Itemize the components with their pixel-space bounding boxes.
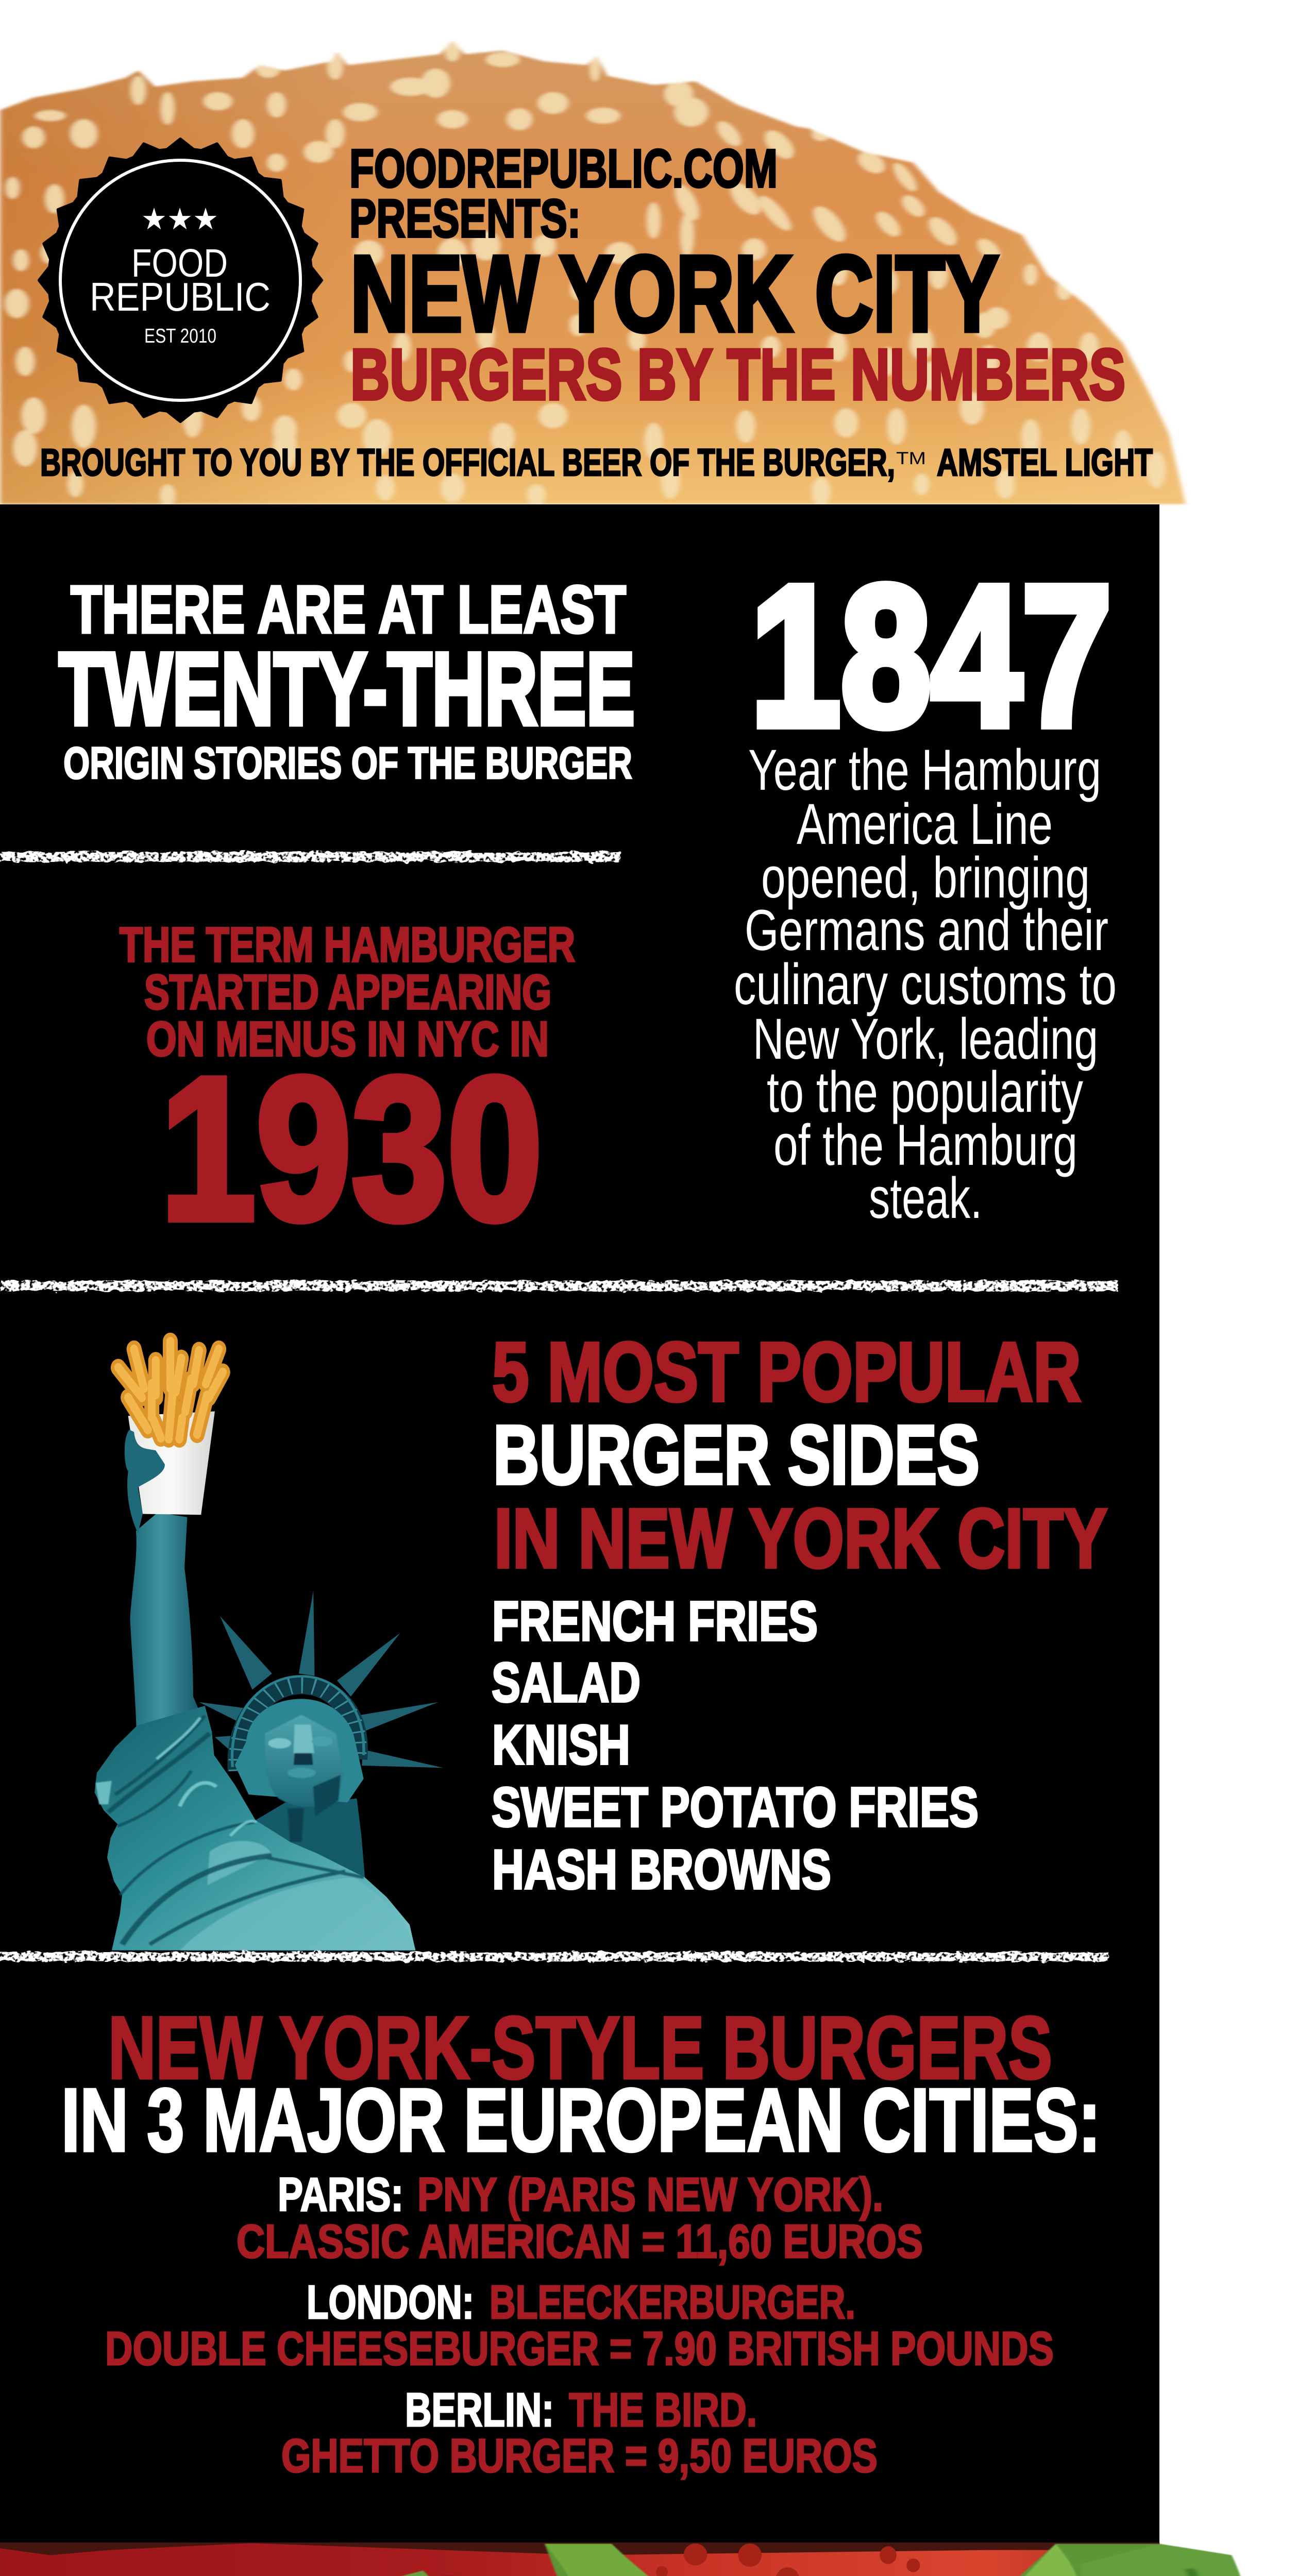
robe (94, 1706, 415, 1951)
black content panel (0, 504, 1159, 2543)
section: 5 most popular burger sides: BURGER SIDES (493, 1408, 980, 1502)
section: 5 most popular burger sides: 5 MOST POPULAR (492, 1325, 1081, 1419)
title block: FOODREPUBLIC.COM (349, 139, 778, 199)
crown rays (199, 1591, 444, 1768)
top bun with sesame seeds (0, 36, 1190, 506)
title block: PRESENTS: (349, 189, 581, 249)
section: 5 most popular burger sides: SWEET POTATO FRIES (492, 1776, 979, 1839)
fries (119, 1342, 223, 1439)
crown band (232, 1676, 364, 1771)
fact: 1847 Hamburg America Line: New York, leading (753, 1007, 1098, 1071)
logo badge: Food Republic: EST 2010 (144, 325, 216, 347)
section: 5 most popular burger sides: KNISH (492, 1714, 630, 1776)
fact: 1847 Hamburg America Line: opened, bringing (761, 845, 1090, 910)
fact: twenty-three origin stories: THERE ARE AT LEAST (71, 571, 626, 647)
fact: hamburger on menus 1930 (120, 918, 575, 1262)
section: 5 most popular burger sides (492, 1325, 1107, 1901)
fact: 1847 Hamburg America Line: America Line (797, 792, 1053, 856)
section: 5 most popular burger sides: SALAD (492, 1651, 641, 1714)
sponsor line: BROUGHT TO YOU BY THE OFFICIAL BEER OF THE BURGER, (40, 441, 895, 484)
fact: 1847 Hamburg America Line: 1847 (750, 545, 1112, 768)
fry cup (128, 1411, 215, 1515)
fact: 1847 Hamburg America Line (734, 545, 1117, 1230)
fact: hamburger on menus 1930: THE TERM HAMBURGER (120, 918, 575, 972)
lettuce folds (100, 2569, 1232, 2576)
raised arm (130, 1513, 199, 1756)
fact: 1847 Hamburg America Line: Year the Hamburg (748, 738, 1101, 802)
section: New York-style burgers in European cities (61, 1998, 1101, 2482)
section: New York-style burgers in European cities: BLEECKERBURGER. (490, 2276, 855, 2329)
logo badge: Food Republic: ★★★ (141, 201, 218, 236)
title block (349, 139, 1125, 415)
illustration: Statue of Liberty holding fries (94, 1342, 444, 1951)
section: 5 most popular burger sides: FRENCH FRIES (492, 1590, 818, 1653)
section: New York-style burgers in European cities: BERLIN: (405, 2384, 554, 2436)
fact: 1847 Hamburg America Line: steak. (869, 1166, 982, 1230)
fact: twenty-three origin stories: ORIGIN STORIES OF THE BURGER (63, 738, 632, 788)
head and hair (235, 1699, 364, 1803)
bottom burger: tomato, lettuce, sauce, bun (0, 2543, 1257, 2576)
sponsor line: TM (896, 449, 926, 468)
fact: hamburger on menus 1930: 1930 (160, 1035, 543, 1262)
fact: 1847 Hamburg America Line: Germans and their (745, 898, 1108, 962)
section: 5 most popular burger sides: IN NEW YORK CITY (494, 1491, 1107, 1585)
section: New York-style burgers in European cities: CLASSIC AMERICAN = 11,60 EUROS (237, 2215, 923, 2268)
sponsor line: AMSTEL LIGHT (937, 441, 1153, 484)
fact: 1847 Hamburg America Line: culinary customs to (734, 952, 1117, 1016)
section: New York-style burgers in European cities: DOUBLE CHEESEBURGER = 7.90 BRITISH POUNDS (105, 2323, 1054, 2375)
fact: 1847 Hamburg America Line: to the popularity (767, 1060, 1083, 1124)
fact: 1847 Hamburg America Line: of the Hamburg (773, 1113, 1077, 1177)
logo badge: Food Republic: FOOD (131, 241, 228, 285)
logo badge: Food Republic (39, 139, 322, 421)
lettuce (0, 2544, 1257, 2576)
hand (125, 1430, 165, 1533)
section: New York-style burgers in European cities: LONDON: (307, 2276, 474, 2329)
fact: hamburger on menus 1930: STARTED APPEARING (144, 965, 551, 1020)
fact: twenty-three origin stories (59, 571, 635, 788)
section: New York-style burgers in European cities: GHETTO BURGER = 9,50 EUROS (281, 2430, 878, 2482)
fact: hamburger on menus 1930: ON MENUS IN NYC IN (146, 1012, 549, 1066)
fact: twenty-three origin stories: TWENTY-THREE (59, 632, 635, 747)
section: New York-style burgers in European cities: PNY (PARIS NEW YORK). (417, 2168, 883, 2221)
section: New York-style burgers in European cities: THE BIRD. (569, 2384, 757, 2436)
title block: NEW YORK CITY (350, 234, 999, 354)
neck and hair falling (256, 1799, 365, 1877)
logo badge: Food Republic: REPUBLIC (90, 274, 271, 319)
tomato (0, 2543, 1159, 2576)
section: 5 most popular burger sides: HASH BROWNS (492, 1838, 831, 1901)
water drops (656, 2544, 937, 2576)
section: New York-style burgers in European cities: PARIS: (278, 2168, 403, 2221)
face (265, 1715, 343, 1816)
